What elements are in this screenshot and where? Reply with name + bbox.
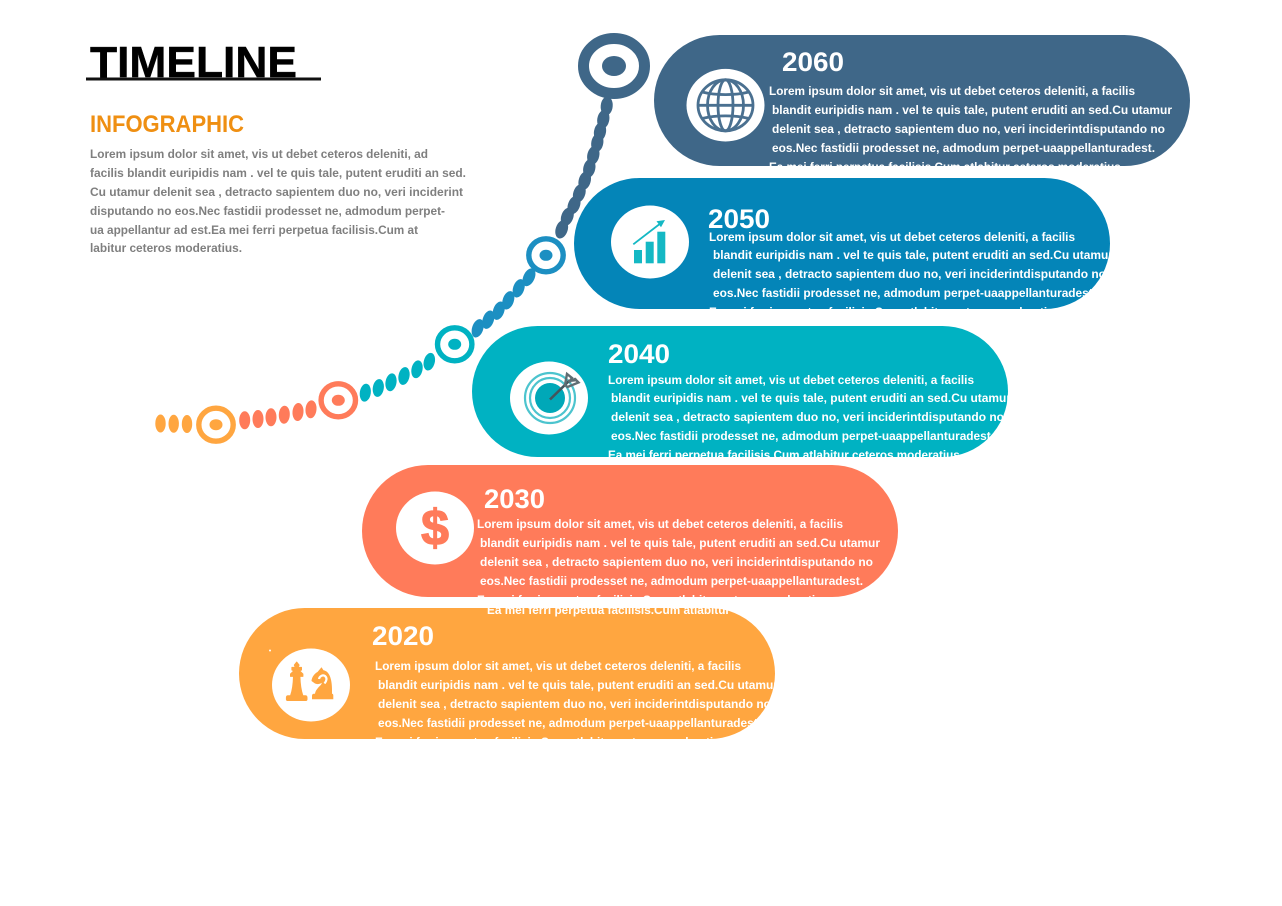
year: 2050 — [708, 204, 770, 234]
icon: globe — [686, 69, 764, 142]
text block: delenit sea , detracto sapientem duo no, veri inciderintdisputando no — [713, 267, 1106, 281]
text block: eos.Nec fastidii prodesset ne, admodum perpet-uaappellanturadest. — [713, 286, 1096, 300]
panel: 2050 — [574, 178, 1113, 319]
blue dots and marker — [469, 239, 563, 339]
text block: Lorem ipsum dolor sit amet, vis ut debet ceteros deleniti, a facilis — [477, 517, 843, 531]
text block: Ea mei ferri perpetua facilisis.Cum atlabitur ceteros moderatius. — [769, 160, 1124, 174]
intro text block: Cu utamur delenit sea , detracto sapientem duo no, veri inciderint — [90, 185, 463, 199]
text block: eos.Nec fastidii prodesset ne, admodum perpet-uaappellanturadest. — [611, 429, 994, 443]
title: TIMELINE — [90, 38, 297, 87]
icon: dollar: $ — [421, 500, 449, 556]
intro text block — [90, 147, 466, 255]
text block: blandit euripidis nam . vel te quis tale, putent eruditi an sed.Cu utamur — [378, 678, 778, 692]
text block: Ea mei ferri perpetua facilisis.Cum atlabitur — [487, 603, 730, 617]
text block — [477, 517, 880, 617]
coral dots and marker — [239, 384, 355, 429]
text block: delenit sea , detracto sapientem duo no, veri inciderintdisputando no — [480, 555, 873, 569]
navy dots and marker — [553, 38, 644, 240]
text block — [769, 84, 1172, 174]
icon: growth chart — [611, 206, 689, 278]
year: 2060 — [782, 47, 844, 77]
text block: blandit euripidis nam . vel te quis tale, putent eruditi an sed.Cu utamur — [611, 391, 1011, 405]
text block — [709, 230, 1113, 319]
icon: chess pieces — [272, 648, 350, 722]
year: 2030 — [484, 484, 545, 514]
text block — [608, 373, 1011, 462]
panel: 2060 — [654, 35, 1190, 174]
intro text block: ua appellantur ad est.Ea mei ferri perpetua facilisis.Cum at — [90, 223, 418, 237]
year: 2020 — [372, 621, 434, 651]
panel: 2030 — [362, 465, 898, 617]
year: 2040 — [608, 339, 670, 369]
intro text block: labitur ceteros moderatius. — [90, 241, 242, 255]
intro text block: Lorem ipsum dolor sit amet, vis ut debet ceteros deleniti, ad — [90, 147, 428, 161]
text block: eos.Nec fastidii prodesset ne, admodum perpet-uaappellanturadest. — [772, 141, 1155, 155]
orange dots and marker — [155, 408, 233, 441]
icon: dollar — [396, 492, 474, 564]
text block: delenit sea , detracto sapientem duo no, veri inciderintdisputando no — [772, 122, 1165, 136]
intro text block: facilis blandit euripidis nam . vel te quis tale, putent eruditi an sed. — [90, 166, 466, 180]
text block: Lorem ipsum dolor sit amet, vis ut debet ceteros deleniti, a facilis — [608, 373, 974, 387]
text block: blandit euripidis nam . vel te quis tale, putent eruditi an sed.Cu utamur — [713, 248, 1113, 262]
timeline path — [155, 38, 645, 441]
teal dots and marker — [359, 328, 472, 402]
text block: eos.Nec fastidii prodesset ne, admodum perpet-uaappellanturadest. — [378, 716, 761, 730]
panel: 2040 — [472, 326, 1011, 462]
text block: Ea mei ferri perpetua facilisis.Cum atlabitur ceteros moderatius. — [477, 593, 832, 607]
text block: delenit sea , detracto sapientem duo no, veri inciderintdisputando no — [611, 410, 1004, 424]
text block: delenit sea , detracto sapientem duo no, veri inciderintdisputando no — [378, 697, 771, 711]
intro text block: disputando no eos.Nec fastidii prodesset ne, admodum perpet- — [90, 204, 445, 218]
text block: Ea mei ferri perpetua facilisis.Cum atlabitur ceteros moderatius. — [375, 735, 730, 749]
text block: Lorem ipsum dolor sit amet, vis ut debet ceteros deleniti, a facilis — [709, 230, 1075, 244]
text block — [375, 659, 778, 749]
text block: blandit euripidis nam . vel te quis tale, putent eruditi an sed.Cu utamur — [480, 536, 880, 550]
text block: Ea mei ferri perpetua facilisis.Cum atlabitur ceteros moderatius. — [709, 305, 1064, 319]
icon: target with dart — [510, 362, 588, 434]
text block: Lorem ipsum dolor sit amet, vis ut debet ceteros deleniti, a facilis — [769, 84, 1135, 98]
text block: eos.Nec fastidii prodesset ne, admodum perpet-uaappellanturadest. — [480, 574, 863, 588]
subtitle: INFOGRAPHIC — [90, 111, 244, 138]
text block: Lorem ipsum dolor sit amet, vis ut debet ceteros deleniti, a facilis — [375, 659, 741, 673]
text block: Ea mei ferri perpetua facilisis.Cum atlabitur ceteros moderatius. — [608, 448, 963, 462]
text block: blandit euripidis nam . vel te quis tale, putent eruditi an sed.Cu utamur — [772, 103, 1172, 117]
panel: 2020 — [239, 608, 778, 749]
